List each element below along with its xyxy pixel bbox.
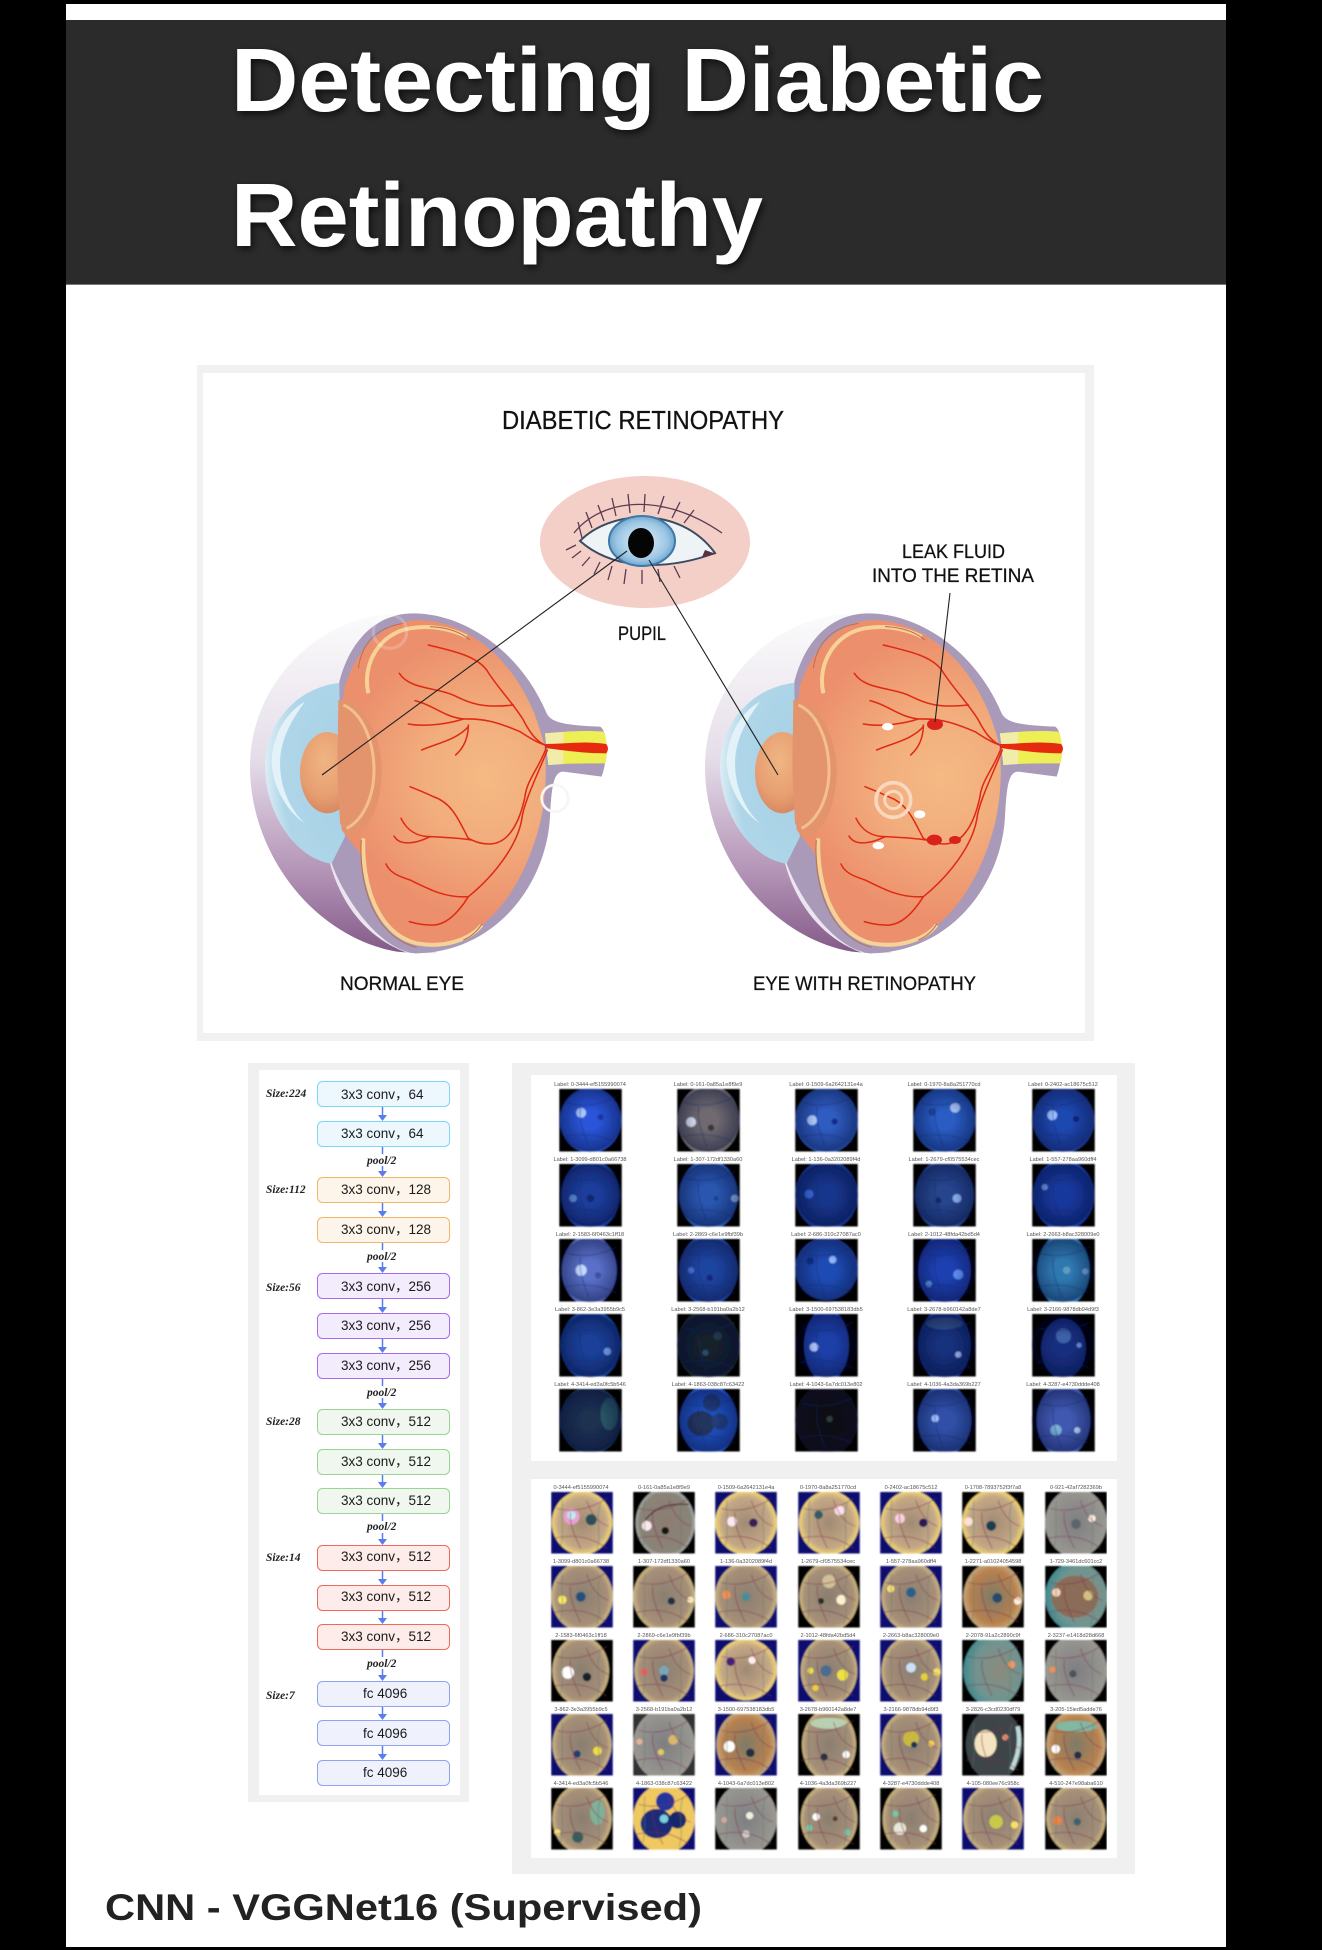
enhanced labels row 4 [554,1707,1102,1713]
title: Detecting Diabetic [231,31,1044,131]
grid labels row 4 [555,1307,1099,1313]
block 8: 3x3 conv，512 [341,1414,431,1429]
label: normal eye: NORMAL EYE [340,974,464,995]
enhanced labels row 2: 1-2679-cf0575534cec [801,1559,855,1565]
grid labels row 5: Label: 4-1863-038c87c63422 [672,1382,744,1388]
callout: leak fluid: INTO THE RETINA [872,566,1034,587]
block 13: 3x3 conv，512 [341,1629,431,1644]
grid labels row 1: Label: 0-2402-ac18675c512 [1028,1082,1098,1088]
panel: diabetic retinopathy illustration [197,365,1094,1041]
enhanced labels row 5: 4-1036-4a3da369b227 [800,1781,856,1787]
title: Retinopathy [231,166,763,266]
block 5: 3x3 conv，256 [341,1279,431,1294]
block 4 [318,1218,450,1242]
grid labels row 4: Label: 3-862-3e3a3955b9c5 [555,1307,625,1313]
pointer lines [322,551,950,775]
enhanced labels row 3: 2-3237-e1418d28d668 [1048,1633,1104,1639]
block 15 [318,1720,450,1746]
block 11 [318,1546,450,1570]
panel: VGG16 architecture [248,1063,469,1802]
enhanced labels row 1: 0-1970-8a8a251770cd [800,1485,856,1491]
enhanced labels row 3: 2-2663-b8ac328009e0 [883,1633,939,1639]
grid labels row 5: Label: 4-3287-e4730ddde408 [1026,1382,1100,1388]
chart: enhanced fundus image grid [531,1479,1117,1858]
enhanced labels row 5: 4-1863-038c87c63422 [636,1781,692,1787]
block 2: 3x3 conv，64 [341,1126,424,1141]
enhanced labels row 5 [554,1781,1103,1787]
size labels: Size:224 [266,1088,306,1100]
size labels: Size:7 [266,1690,296,1702]
enhanced labels row 1: 0-1509-6a2642131e4a [718,1485,775,1491]
size labels: Size:28 [266,1416,301,1428]
enhanced labels row 3 [555,1633,1104,1639]
pool labels: pool/2 [366,1658,397,1670]
pool labels: pool/2 [366,1251,397,1263]
grid labels row 1: Label: 0-3444-ef5155990074 [554,1082,626,1088]
enhanced labels row 5: 4-3287-e4730ddde408 [883,1781,939,1787]
enhanced labels row 1: 0-2402-ac18675c512 [885,1485,937,1491]
size labels: Size:56 [266,1282,301,1294]
block 10 [318,1488,450,1514]
block 1 [318,1082,450,1106]
block 6 [318,1314,450,1338]
fundus images [559,1085,1096,1456]
pool labels: pool/2 [366,1155,397,1167]
block 8 [318,1410,450,1434]
illustration heading: DIABETIC RETINOPATHY [502,407,784,435]
enhanced labels row 3: 2-2078-91a2c2890c9f [966,1633,1021,1639]
block 6: 3x3 conv，256 [341,1318,431,1333]
enhanced labels row 1: 0-921-42af7282369b [1050,1485,1102,1491]
enhanced labels row 2: 1-729-3461dc601cc2 [1050,1559,1102,1565]
enhanced labels row 5: 4-1043-6a7dc013e802 [718,1781,774,1787]
grid labels row 2: Label: 1-3099-d801c0a66738 [553,1157,627,1163]
block 7 [318,1354,450,1378]
arrow heads [378,1115,387,1760]
grid labels row 5 [554,1382,1100,1388]
title [231,31,1044,266]
size labels [266,1088,306,1702]
grid labels row 3: Label: 2-686-310c27087ac0 [791,1232,861,1238]
callout: leak fluid: LEAK FLUID [902,542,1005,563]
grid labels row 4: Label: 3-2166-9878db94d9f3 [1027,1307,1099,1313]
enhanced labels row 4: 3-205-15ied5adde76 [1050,1707,1102,1713]
enhanced labels row 1: 0-3444-ef5155990074 [553,1485,609,1491]
enhanced labels row 4: 3-2826-c3cd0230df79 [966,1707,1020,1713]
grid labels row 3 [556,1232,1100,1238]
grid labels row 3: Label: 2-1583-6f0463c1ff18 [556,1232,624,1238]
grid labels row 1: Label: 0-1509-6a2642131e4a [789,1082,864,1088]
block 13 [318,1624,450,1650]
enhanced labels row 3: 2-1012-48fda42bd5d4 [800,1633,856,1639]
pool labels [366,1154,400,1670]
icon: normal eye cross-section [250,613,608,953]
enhanced labels row 4: 3-2568-b191ba0a2b12 [636,1707,692,1713]
block 1: 3x3 conv，64 [341,1087,424,1102]
grid labels row 3: Label: 2-1012-48fda42bd5d4 [908,1232,980,1238]
grid labels row 4: Label: 3-2568-b191ba0a2b12 [671,1307,745,1313]
block 5 [318,1274,450,1298]
block 7: 3x3 conv，256 [341,1358,431,1373]
block 16 [318,1760,450,1786]
grid labels row 2 [553,1157,1097,1163]
grid labels row 3: Label: 2-2663-b8ac328009e0 [1026,1232,1100,1238]
size labels: Size:112 [266,1184,306,1196]
enhanced labels row 2: 1-307-172df1330a60 [638,1559,690,1565]
enhanced labels row 4: 3-1500-697538183db5 [718,1707,774,1713]
grid labels row 5: Label: 4-3414-ed3a0fc5b546 [554,1382,626,1388]
grid labels row 1: Label: 0-1970-8a8a251770cd [907,1082,981,1088]
block 12 [318,1586,450,1610]
enhanced labels row 1: 0-1708-7893752f3f7a8 [965,1485,1021,1491]
enhanced labels row 2: 1-557-278aa960dff4 [886,1559,936,1565]
callout: leak fluid [872,542,1034,587]
label: pupil: PUPIL [618,624,666,645]
enhanced labels row 2: 1-3099-d801c0a66738 [553,1559,609,1565]
footer caption: CNN - VGGNet16 (Supervised) [105,1886,702,1928]
pool labels: pool/2 [366,1521,397,1533]
block 2 [318,1122,450,1146]
enhanced labels row 5: 4-510-247e98aba610 [1049,1781,1103,1787]
grid labels row 2: Label: 1-2679-cf0575534cec [909,1157,980,1163]
enhanced labels row 3: 2-1583-6f0463c1ff18 [555,1633,607,1639]
pool labels: pool/2 [366,1387,397,1399]
block 3: 3x3 conv，128 [341,1182,431,1197]
grid labels row 2: Label: 1-307-172df1330a60 [674,1157,742,1163]
icon: eye with retinopathy cross-section [705,613,1063,953]
grid labels row 5: Label: 4-1043-6a7dc013e802 [789,1382,863,1388]
label: eye with retinopathy: EYE WITH RETINOPATHY [753,974,976,995]
grid labels row 2: Label: 1-136-0a3202089f4d [792,1157,860,1163]
block 14 [318,1682,450,1706]
title banner [66,20,1226,285]
enhanced labels row 2: 1-2271-a01024054598 [965,1559,1021,1565]
enhanced labels row 1: 0-161-0a85a1e8f9e9 [638,1485,690,1491]
block 11: 3x3 conv，512 [341,1549,431,1564]
enhanced labels row 4: 3-2166-9878db94d9f3 [883,1707,939,1713]
connectors [382,1106,384,1757]
block 9 [318,1450,450,1474]
grid labels row 4: Label: 3-1500-697538183db5 [789,1307,863,1313]
enhanced labels row 4: 3-2678-b960142a8de7 [800,1707,856,1713]
enhanced labels row 4: 3-862-3e3a3955b9c5 [554,1707,608,1713]
grid labels row 3: Label: 2-2869-c6e1e9fbf39b [673,1232,743,1238]
grid labels row 4: Label: 3-2678-b960142a8de7 [907,1307,981,1313]
block 12: 3x3 conv，512 [341,1589,431,1604]
enhanced labels row 2: 1-136-0a3202089f4d [720,1559,772,1565]
panel: fundus image samples [512,1063,1135,1874]
icon: front view of eye [540,476,750,608]
block 3 [318,1178,450,1202]
enhanced labels row 5: 4-3414-ed3a0fc5b546 [554,1781,608,1787]
enhanced labels row 5: 4-105-080ee76c958c [967,1781,1020,1787]
grid labels row 1: Label: 0-161-0a85a1e8f9e9 [674,1082,742,1088]
block 14: fc 4096 [363,1686,407,1701]
enhanced labels row 3: 2-686-310c27087ac0 [720,1633,772,1639]
enhanced labels row 2 [553,1559,1102,1565]
block 9: 3x3 conv，512 [341,1454,431,1469]
enhanced fundus images [551,1488,1107,1854]
enhanced labels row 3: 2-2869-c6e1e9fbf39b [637,1633,691,1639]
grid labels row 1 [554,1082,1098,1088]
block 4: 3x3 conv，128 [341,1222,431,1237]
block 10: 3x3 conv，512 [341,1493,431,1508]
size labels: Size:14 [266,1552,301,1564]
grid labels row 2: Label: 1-557-278aa960dff4 [1029,1157,1097,1163]
block 16: fc 4096 [363,1765,407,1780]
block 15: fc 4096 [363,1726,407,1741]
grid labels row 5: Label: 4-1036-4a3da369b227 [907,1382,981,1388]
enhanced labels row 1 [553,1485,1102,1491]
chart: original fundus image grid [531,1075,1117,1461]
